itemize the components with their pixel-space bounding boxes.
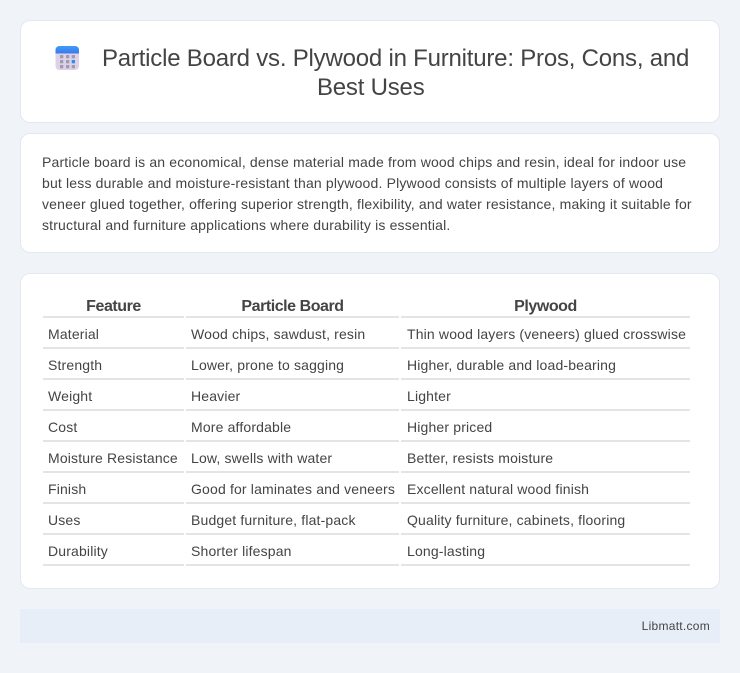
row: strength: [43, 357, 690, 380]
row: uses: Quality furniture, cabinets, flooring: [407, 512, 625, 528]
header: feature: Feature: [86, 298, 141, 315]
header: particle board: Particle Board: [241, 298, 344, 315]
row: cost: Higher priced: [407, 419, 492, 435]
summary text: but less durable and moisture-resistant than plywood. Plywood consists of multiple layers of wood: [42, 175, 663, 191]
row: durability: Durability: [48, 543, 108, 559]
row: uses: Uses: [48, 512, 81, 528]
row: durability: Shorter lifespan: [191, 543, 292, 559]
row: strength: Strength: [48, 357, 102, 373]
row: moisture resistance: [43, 450, 690, 473]
row: uses: Budget furniture, flat-pack: [191, 512, 356, 528]
row: cost: More affordable: [191, 419, 291, 435]
header: plywood: Plywood: [514, 298, 577, 315]
row: durability: [43, 543, 690, 566]
row: material: Wood chips, sawdust, resin: [191, 326, 365, 342]
row: moisture resistance: Better, resists moisture: [407, 450, 553, 466]
summary text: veneer glued together, offering superior strength, flexibility, and water resistance, making it suitable for: [42, 196, 692, 212]
row: strength: Lower, prone to sagging: [191, 357, 344, 373]
row: material: Material: [48, 326, 99, 342]
row: cost: Cost: [48, 419, 77, 435]
row: finish: Finish: [48, 481, 86, 497]
header panel: [20, 20, 720, 123]
row: moisture resistance: Moisture Resistance: [48, 450, 178, 466]
footer text: Libmatt.com: [642, 619, 710, 633]
row: material: [43, 326, 690, 349]
row: cost: [43, 419, 690, 442]
row: finish: Excellent natural wood finish: [407, 481, 589, 497]
summary text: structural and furniture applications where durability is essential.: [42, 217, 450, 233]
title: Particle Board vs. Plywood in Furniture: Pros, Cons, and: [102, 45, 689, 72]
row: finish: [43, 481, 690, 504]
row: strength: Higher, durable and load-bearing: [407, 357, 616, 373]
row: material: Thin wood layers (veneers) glued crosswise: [407, 326, 686, 342]
row: weight: Lighter: [407, 388, 451, 404]
row: weight: Heavier: [191, 388, 240, 404]
row: durability: Long-lasting: [407, 543, 485, 559]
summary text: Particle board is an economical, dense material made from wood chips and resin, ideal for indoor use: [42, 154, 686, 170]
summary panel: [20, 133, 720, 253]
summary text: [42, 154, 692, 233]
row: uses: [43, 512, 690, 535]
footer bar: [20, 609, 720, 643]
row: finish: Good for laminates and veneers: [191, 481, 395, 497]
comparison table panel: [20, 273, 720, 589]
row: weight: Weight: [48, 388, 92, 404]
row: moisture resistance: Low, swells with water: [191, 450, 332, 466]
table: [43, 298, 690, 566]
title second line: Best Uses: [317, 74, 424, 101]
row: weight: [43, 388, 690, 411]
icon: calendar: [56, 46, 79, 70]
